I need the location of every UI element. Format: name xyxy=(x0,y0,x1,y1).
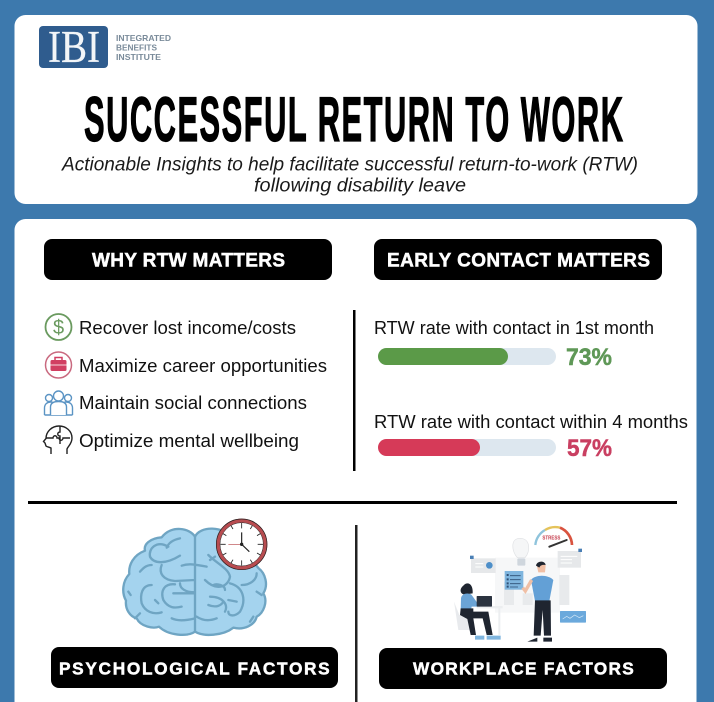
chart: RTW rate with contact in first month xyxy=(374,318,654,371)
heading: why RTW matters xyxy=(44,239,332,280)
heading: why RTW matters: WHY RTW MATTERS xyxy=(92,250,285,272)
divider: vertical bottom xyxy=(355,525,358,702)
heading: psychological factors xyxy=(51,647,338,688)
standing man xyxy=(523,562,553,642)
clock xyxy=(216,519,267,570)
divider: horizontal xyxy=(28,501,677,504)
icon: head with puzzle xyxy=(44,426,72,454)
chart: RTW rate with contact within four months: RTW rate with contact within 4 months xyxy=(374,412,688,432)
list: why RTW matters xyxy=(44,314,327,454)
chart: RTW rate with contact in first month: RTW rate with contact in 1st month xyxy=(374,318,654,338)
heading: early contact matters xyxy=(374,239,662,280)
chart: RTW rate with contact within four months: 57% xyxy=(567,435,612,462)
panel: header xyxy=(14,15,698,204)
chart: RTW rate with contact within four months xyxy=(374,412,688,462)
subtitle: Actionable Insights to help facilitate successful return-to-work (RTW) xyxy=(61,154,638,176)
icon: dollar coin xyxy=(46,314,72,340)
heading: psychological factors: PSYCHOLOGICAL FACTORS xyxy=(59,658,330,679)
text: recover income: Recover lost income/costs xyxy=(79,318,296,338)
icon: people xyxy=(44,391,72,415)
dashboard cards xyxy=(470,549,586,623)
heading: workplace factors: WORKPLACE FACTORS xyxy=(413,658,634,679)
illustration: workplace stress xyxy=(454,527,586,642)
seated woman at laptop xyxy=(454,583,503,640)
icon: briefcase xyxy=(46,352,72,378)
light bulb xyxy=(513,538,529,566)
logo: IBI xyxy=(48,22,100,72)
logo: INSTITUTE xyxy=(116,52,161,62)
text: career opportunities: Maximize career opportunities xyxy=(79,356,327,376)
heading: early contact matters: EARLY CONTACT MATTERS xyxy=(387,250,650,272)
heading: workplace factors xyxy=(379,648,667,689)
icon: dollar coin: $ xyxy=(53,317,64,339)
title: SUCCESSFUL RETURN TO WORK xyxy=(84,84,623,155)
logo: BENEFITS xyxy=(116,42,157,52)
brain xyxy=(123,529,266,635)
chart: RTW rate with contact in first month: 73% xyxy=(566,344,612,371)
illustration: brain with clock xyxy=(123,519,267,635)
text: mental wellbeing: Optimize mental wellbeing xyxy=(79,431,299,451)
divider: vertical top xyxy=(353,310,356,471)
subtitle: following disability leave xyxy=(254,176,466,196)
stress gauge: STRESS xyxy=(542,536,561,542)
panel: main content xyxy=(14,219,696,702)
background board and charts xyxy=(495,558,569,613)
logo xyxy=(39,22,171,72)
logo: INTEGRATED xyxy=(116,33,171,43)
subtitle xyxy=(61,154,638,196)
text: social connections: Maintain social connections xyxy=(79,393,307,413)
